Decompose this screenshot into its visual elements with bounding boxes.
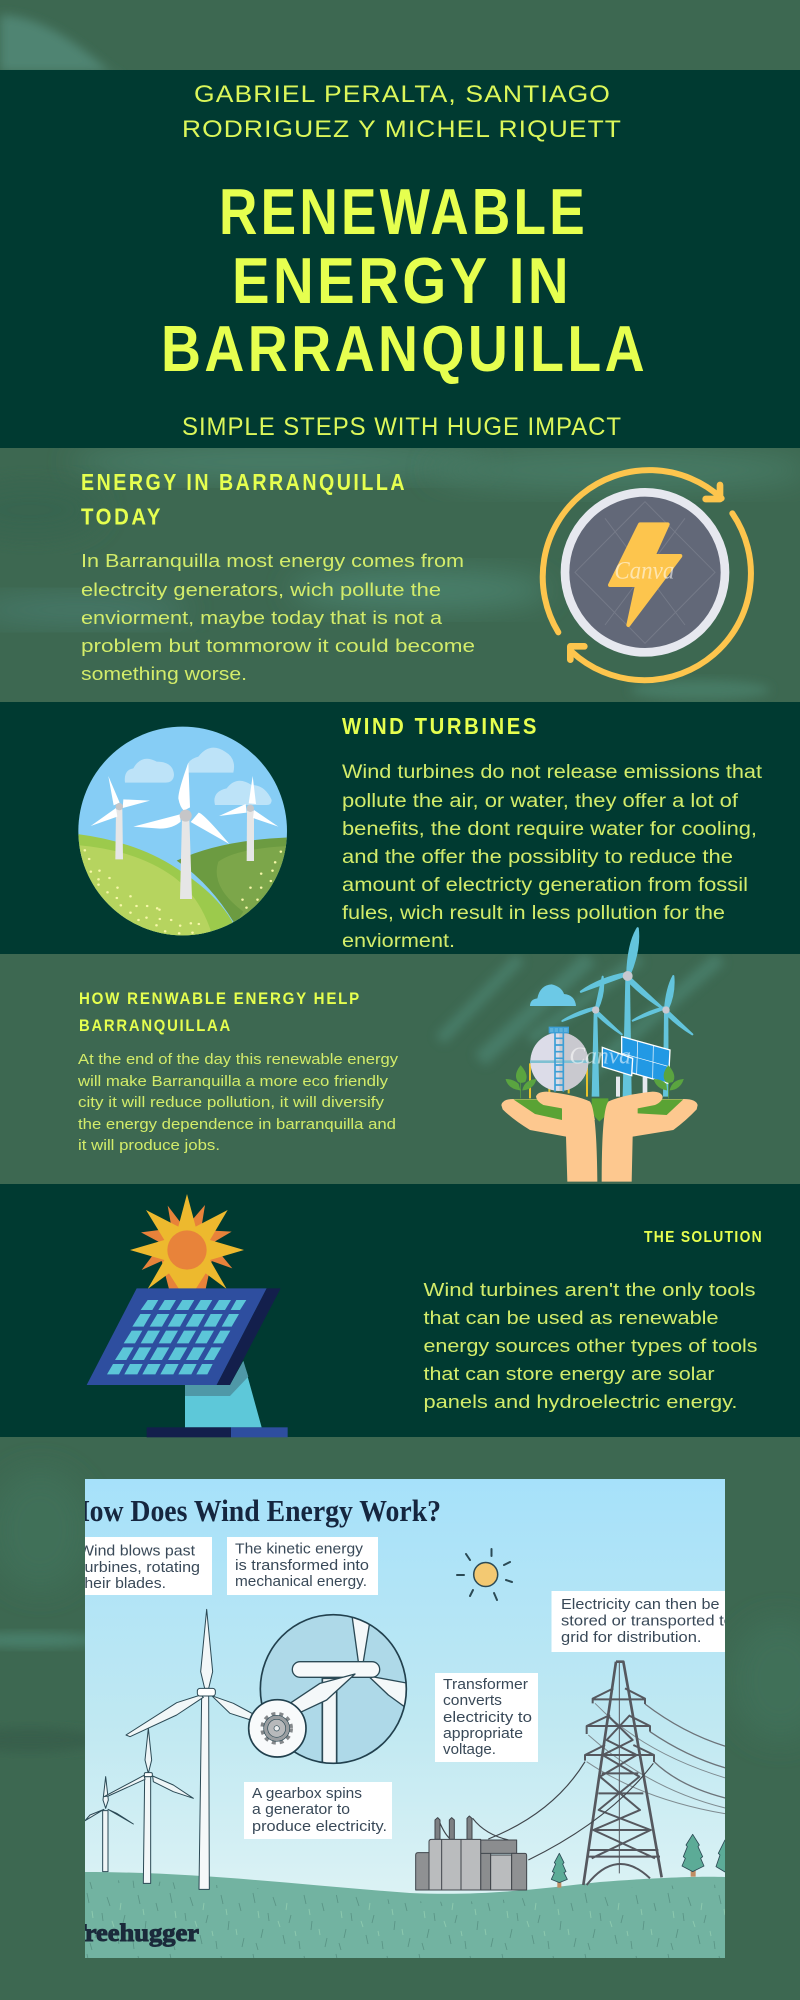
heading: ENERGY IN BARRANQUILLA — [81, 469, 407, 495]
panel: the solution — [0, 1184, 800, 1437]
illustration: grass — [85, 1872, 725, 1958]
body text: that can store energy are solar — [424, 1363, 714, 1384]
callout: kinetic energy: is transformed into — [235, 1558, 369, 1574]
panel: how renewable energy helps — [77, 928, 698, 1182]
body text — [424, 1279, 758, 1412]
panel: title band — [0, 70, 800, 448]
callout: gearbox — [244, 1782, 392, 1839]
heading — [79, 989, 361, 1035]
callout: transformer: Transformer — [443, 1677, 528, 1693]
heading: HOW RENWABLE ENERGY HELP — [79, 989, 361, 1008]
logo: treehugger: Treehugger — [69, 1920, 199, 1947]
panel: energy in Barranquilla today — [81, 469, 751, 684]
heading: BARRANQUILLAA — [79, 1016, 232, 1035]
callout: wind blows past: turbines, rotating — [80, 1560, 200, 1576]
authors: GABRIEL PERALTA, SANTIAGO — [194, 81, 611, 108]
body text: and the offer the possiblity to reduce the — [342, 847, 733, 868]
callout: kinetic energy: The kinetic energy — [235, 1542, 364, 1558]
authors: RODRIGUEZ Y MICHEL RIQUETT — [182, 116, 622, 143]
title: BARRANQUILLA — [161, 312, 648, 385]
icon: hands holding green energy — [501, 928, 698, 1182]
body text: electrcity generators, wich pollute the — [81, 580, 441, 600]
illustration: wind turbines and magnifier — [85, 1609, 408, 1889]
body text: Wind turbines aren't the only tools — [424, 1279, 756, 1300]
callout: gearbox: produce electricity. — [252, 1819, 387, 1835]
body text: panels and hydroelectric energy. — [424, 1391, 738, 1412]
callout: transformer: converts — [443, 1693, 502, 1709]
icon: hands holding green energy: Canva — [569, 1043, 631, 1069]
body text: At the end of the day this renewable energy — [78, 1051, 399, 1068]
icon: solar panel and sun — [87, 1194, 288, 1437]
callout: electricity storage: stored or transported to — [561, 1614, 733, 1630]
callout: kinetic energy: mechanical energy. — [235, 1574, 367, 1590]
body text: amount of electricty generation from fossil — [342, 875, 748, 896]
title — [161, 175, 648, 385]
icon: lightning bolt in cycle arrows — [543, 470, 751, 680]
callout: transformer — [435, 1673, 538, 1762]
title: ENERGY IN — [232, 244, 572, 317]
body text: fules, wich result in less pollution for the — [342, 903, 725, 924]
body text: enviorment. — [342, 931, 455, 952]
body text — [77, 1051, 399, 1154]
body text: energy sources other types of tools — [424, 1335, 758, 1356]
callout: kinetic energy — [227, 1537, 378, 1595]
body text: something worse. — [81, 664, 247, 684]
body text: Wind turbines do not release emissions that — [342, 762, 763, 783]
callout: electricity storage: grid for distribution. — [561, 1630, 702, 1646]
body text: will make Barranquilla a more eco friendly — [77, 1073, 389, 1090]
callout: electricity storage — [552, 1591, 733, 1652]
heading: WIND TURBINES — [342, 713, 539, 739]
callout: gearbox: A gearbox spins — [252, 1786, 362, 1802]
callout: transformer: electricity to — [443, 1710, 532, 1726]
icon: wind turbines on hills — [78, 726, 287, 936]
body text: enviorment, maybe today that is not a — [81, 608, 443, 628]
body text — [81, 551, 475, 684]
body text: In Barranquilla most energy comes from — [81, 551, 464, 571]
body text: that can be used as renewable — [424, 1307, 718, 1328]
callout: wind blows past: Wind blows past — [79, 1544, 195, 1560]
body text — [342, 762, 763, 952]
callout: electricity storage: Electricity can then be — [561, 1597, 720, 1613]
title: RENEWABLE — [219, 175, 588, 248]
callout: wind blows past: their blades. — [80, 1576, 166, 1592]
right hand — [602, 1092, 698, 1182]
body text: the energy dependence in barranquilla and — [78, 1116, 396, 1133]
illustration: pylon, transformer and trees — [416, 1662, 730, 1890]
callout: gearbox: a generator to — [252, 1802, 350, 1818]
subtitle: SIMPLE STEPS WITH HUGE IMPACT — [182, 413, 622, 441]
left hand — [501, 1092, 597, 1182]
callout: wind blows past — [79, 1537, 212, 1595]
callout: transformer: voltage. — [443, 1742, 496, 1758]
body text: it will produce jobs. — [78, 1137, 220, 1154]
panel: wind turbines — [0, 702, 800, 954]
body text: benefits, the dont require water for cooling, — [342, 819, 757, 840]
chart: how does wind energy work diagram — [68, 1479, 733, 1958]
heading — [81, 469, 407, 530]
icon: lightning bolt in cycle arrows: Canva — [614, 556, 674, 584]
body text: city it will reduce pollution, it will diversify — [78, 1094, 385, 1111]
body text: problem but tommorow it could become — [81, 636, 475, 656]
body text: pollute the air, or water, they offer a lot of — [342, 791, 739, 812]
authors — [182, 81, 622, 143]
icon: sun — [457, 1549, 512, 1600]
heading: TODAY — [81, 504, 163, 530]
heading: THE SOLUTION — [644, 1229, 763, 1246]
heading: how does wind energy work: How Does Wind Energy Work? — [68, 1493, 441, 1528]
callout: transformer: appropriate — [443, 1726, 523, 1742]
